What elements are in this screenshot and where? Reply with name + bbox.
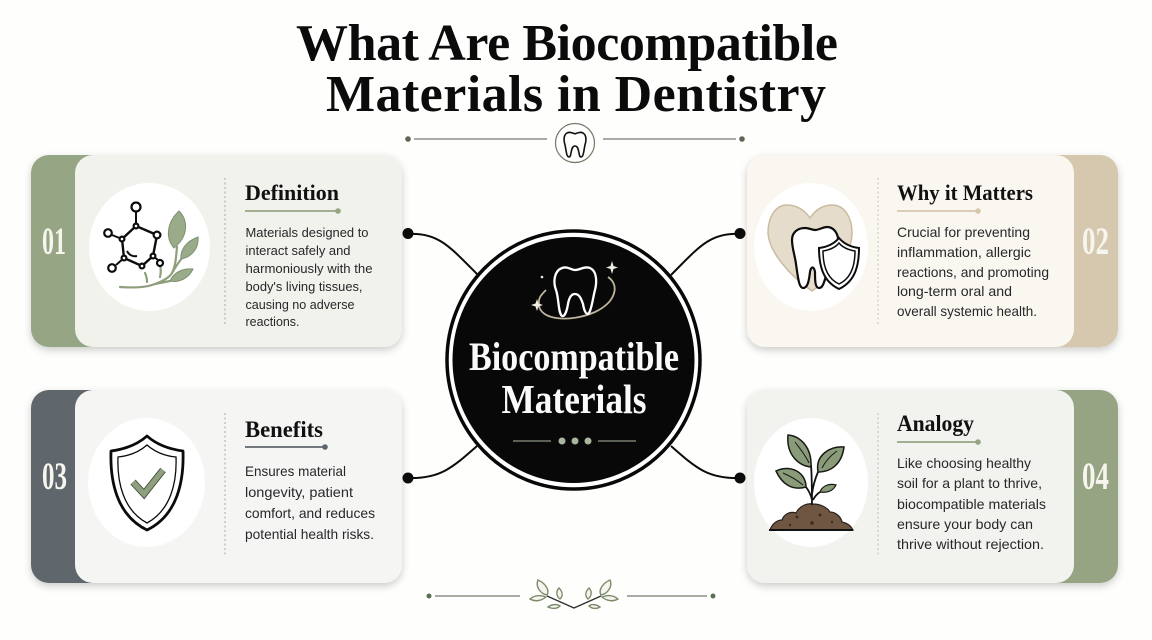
- text: analogy: Like choosing healthy: [897, 455, 1031, 471]
- icon: molecule and leaves: [89, 183, 210, 311]
- connectors: [402, 228, 746, 484]
- text: benefits: potential health risks.: [245, 526, 374, 542]
- text: benefits: Ensures material: [245, 463, 346, 479]
- footer divider with laurel: [426, 580, 716, 608]
- text: definition: harmoniously with the: [246, 261, 372, 276]
- panel: why it matters: [747, 155, 1118, 347]
- number 03: 03: [42, 455, 67, 498]
- text: benefits: longevity, patient: [245, 484, 353, 500]
- number 01: 01: [42, 220, 66, 263]
- text: definition: [246, 225, 372, 329]
- text: definition: reactions.: [246, 314, 300, 329]
- heading: benefits: Benefits: [245, 417, 323, 442]
- hub divider: [513, 438, 636, 444]
- panel: definition: [31, 155, 402, 347]
- text: why it matters: Crucial for preventing: [897, 224, 1030, 240]
- icon: heart, tooth and shield: [754, 183, 868, 311]
- panel: analogy: [747, 390, 1118, 583]
- text: analogy: biocompatible materials: [897, 496, 1046, 512]
- text: analogy: thrive without rejection.: [897, 536, 1044, 552]
- heading: definition: Definition: [245, 180, 339, 205]
- text: definition: body's living tissues,: [246, 279, 362, 294]
- icon: shield with check: [88, 418, 205, 547]
- hub label: Materials: [502, 376, 646, 422]
- header divider with tooth icon: [405, 124, 745, 162]
- text: analogy: ensure your body can: [897, 516, 1033, 532]
- panel: benefits: [31, 390, 402, 583]
- text: analogy: [897, 455, 1046, 552]
- text: definition: Materials designed to: [246, 225, 368, 240]
- heading: why it matters: Why it Matters: [897, 180, 1033, 205]
- text: why it matters: long-term oral and: [897, 283, 1012, 299]
- text: definition: causing no adverse: [246, 297, 354, 312]
- text: analogy: soil for a plant to thrive,: [897, 475, 1042, 491]
- text: benefits: [245, 463, 375, 542]
- central hub: [447, 231, 700, 489]
- text: definition: interact safely and: [246, 243, 350, 258]
- text: why it matters: reactions, and promoting: [897, 264, 1049, 280]
- text: why it matters: inflammation, allergic: [897, 244, 1031, 260]
- hub label: [469, 334, 679, 422]
- text: why it matters: overall systemic health.: [897, 303, 1037, 319]
- hub label: Biocompatible: [469, 334, 679, 379]
- text: why it matters: [897, 224, 1049, 319]
- number 04: 04: [1082, 455, 1109, 498]
- title: [296, 15, 838, 123]
- number 02: 02: [1082, 220, 1109, 263]
- title: What Are Biocompatible: [296, 15, 838, 72]
- heading: analogy: Analogy: [897, 411, 974, 436]
- title: Materials in Dentistry: [326, 66, 826, 123]
- icon: seedling in soil: [754, 418, 868, 547]
- icon: tooth with orbit: [531, 261, 618, 319]
- text: benefits: comfort, and reduces: [245, 505, 375, 521]
